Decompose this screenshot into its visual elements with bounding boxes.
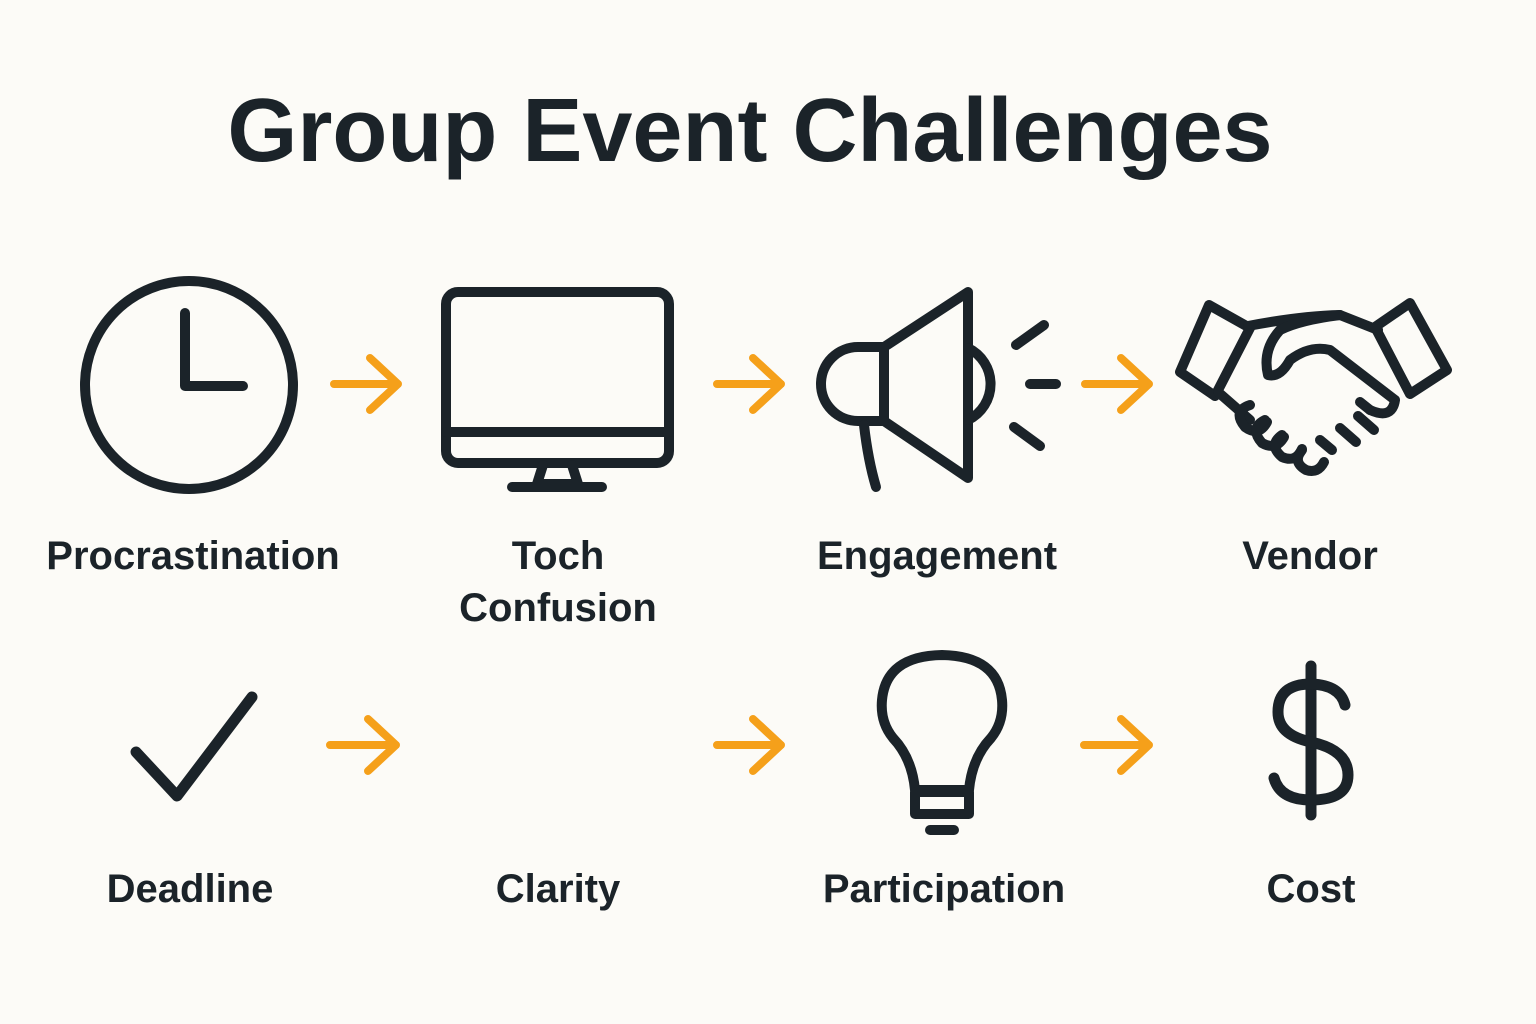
icon: megaphone xyxy=(821,292,1056,487)
label: Engagement: Engagement xyxy=(817,534,1057,578)
icon: lightbulb xyxy=(882,655,1002,830)
arrows row 2 xyxy=(330,719,1149,771)
label: Cost: Cost xyxy=(1267,867,1355,911)
label: Clarity: Clarity xyxy=(496,867,621,911)
label: Toch Confusion: Toch xyxy=(512,534,604,578)
icon: handshake xyxy=(1180,303,1447,471)
label: Deadline: Deadline xyxy=(107,867,273,911)
arrows row 1 xyxy=(334,358,1149,410)
icon: monitor xyxy=(446,292,669,487)
title: Group Event Challenges xyxy=(227,81,1273,181)
icon: checkmark xyxy=(136,697,252,796)
icon: dollar xyxy=(1274,666,1348,815)
label: Toch Confusion: Confusion xyxy=(459,586,657,630)
label: Procrastination: Procrastination xyxy=(46,534,340,578)
label: Vendor: Vendor xyxy=(1242,534,1378,578)
icon: clock xyxy=(85,281,293,489)
label: Participation: Participation xyxy=(823,867,1065,911)
